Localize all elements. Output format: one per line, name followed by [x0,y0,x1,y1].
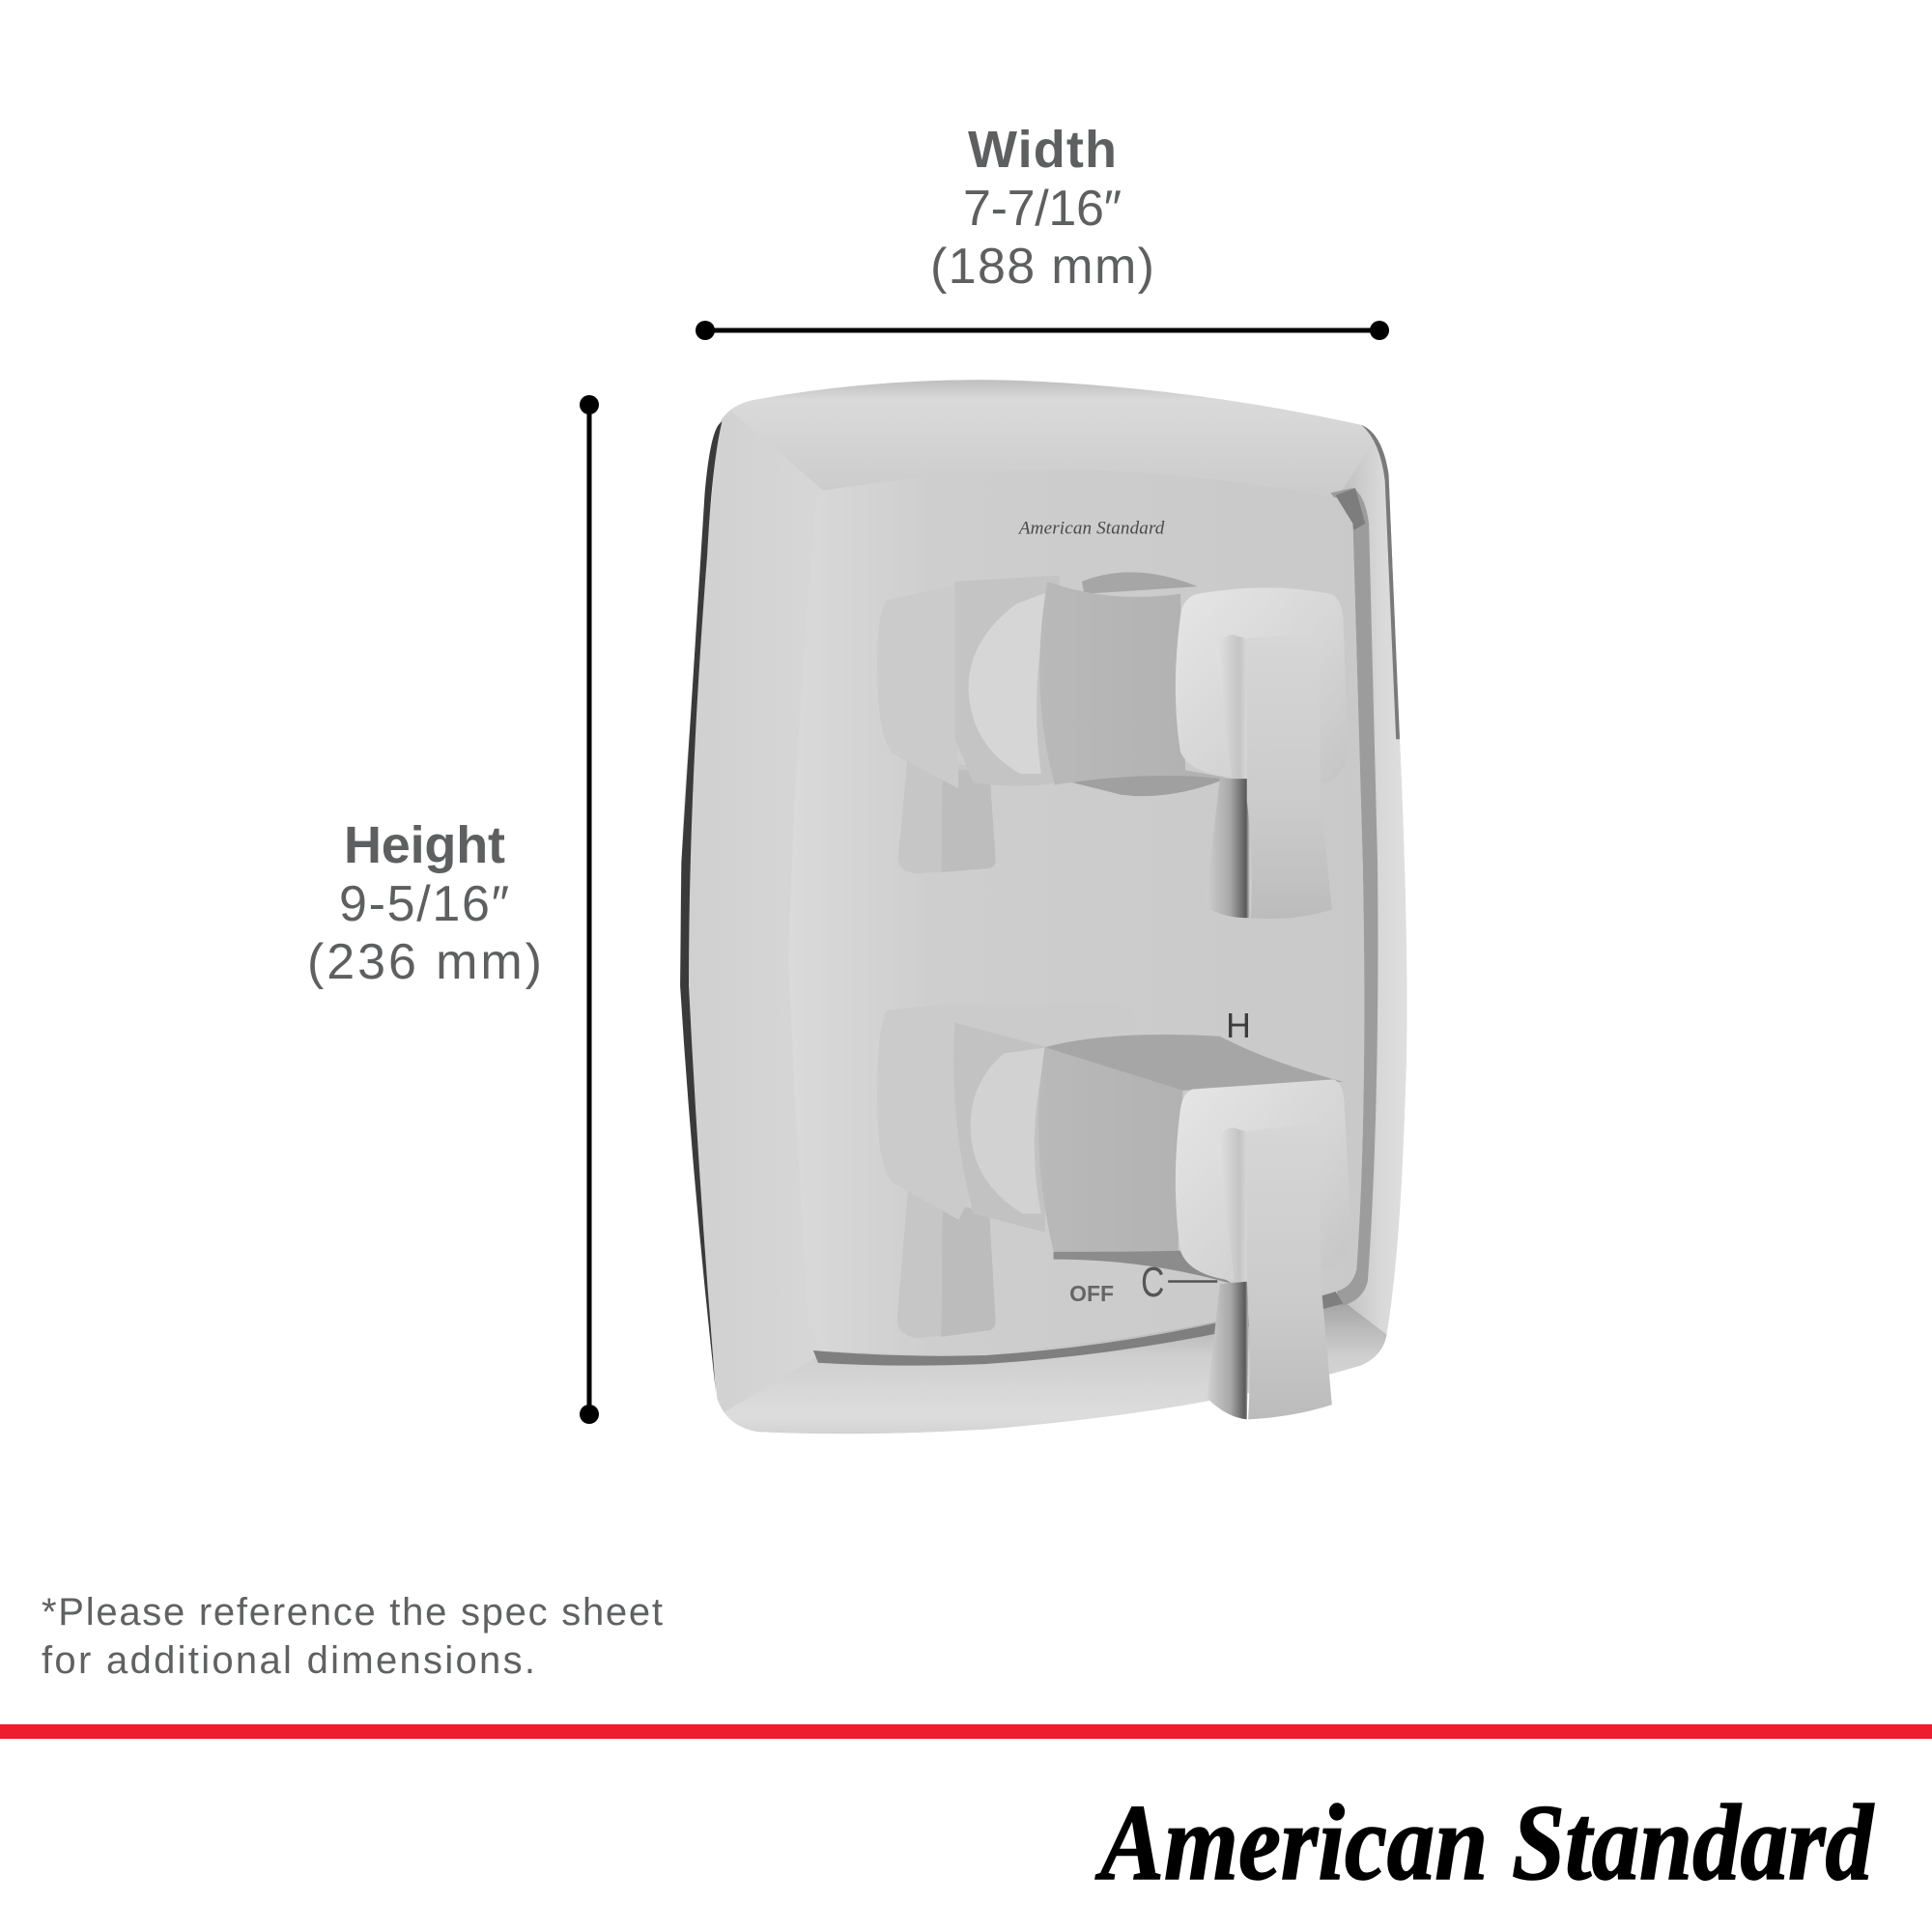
inner panel [788,469,1364,1353]
engraved brand mark: American Standard [1017,518,1165,538]
upper collar highlight [969,591,1050,774]
plate right dark edge [1361,425,1400,739]
lower rear lever [897,1189,996,1338]
footnote: *Please reference the spec sheet [42,1591,663,1634]
H temperature mark: H [1226,1007,1251,1045]
height label: 9-5/16″ [339,876,509,932]
lower handle [877,1003,1351,1419]
upper handle face [1176,587,1348,783]
upper back plate [877,585,958,788]
lower barrel underside [1054,1251,1233,1284]
lower collar [953,1023,1047,1233]
product: shower valve trim [666,370,1430,1454]
C dash [1168,1280,1217,1283]
lower barrel top [1045,1035,1343,1091]
lower collar highlight [971,1047,1047,1213]
width dimension line [696,321,1389,340]
height label [307,816,542,990]
width label: (188 mm) [930,239,1154,295]
lower back plate [877,1003,1136,1220]
width label: Width [968,121,1117,179]
inner panel right shadow [1331,488,1378,1306]
footnote [42,1591,663,1682]
lower handle face [1176,1079,1351,1282]
height label: (236 mm) [307,934,542,990]
upper handle [877,572,1348,919]
upper lever side [1216,635,1254,779]
lower rear lever shade [941,1202,996,1337]
upper lever lower side [1205,779,1251,918]
height label: Height [344,816,505,874]
OFF mark: OFF [1069,1281,1114,1306]
height dimension line [580,395,599,1424]
cover plate bevel bands [666,370,1430,1454]
lower lever lower side [1208,1282,1249,1419]
lower barrel side [1038,1047,1233,1284]
lower lever front [1247,1123,1332,1419]
upper barrel bottom [1072,775,1226,796]
upper barrel top [1082,572,1198,594]
width label [930,121,1154,295]
inner panel top right dark corner [1336,488,1365,529]
lower lever side [1217,1127,1254,1282]
upper lever front [1247,635,1332,919]
upper rear lever shade [941,770,996,872]
plate left dark edge [680,421,722,1392]
C temperature mark: C [1141,1260,1164,1306]
width label: 7-7/16″ [963,181,1122,237]
inner panel bottom shadow [813,1292,1343,1366]
red divider bar [0,1724,1932,1739]
upper collar [955,576,1060,785]
upper barrel [1039,582,1233,784]
footnote: for additional dimensions. [42,1639,535,1682]
upper rear lever [898,754,996,873]
